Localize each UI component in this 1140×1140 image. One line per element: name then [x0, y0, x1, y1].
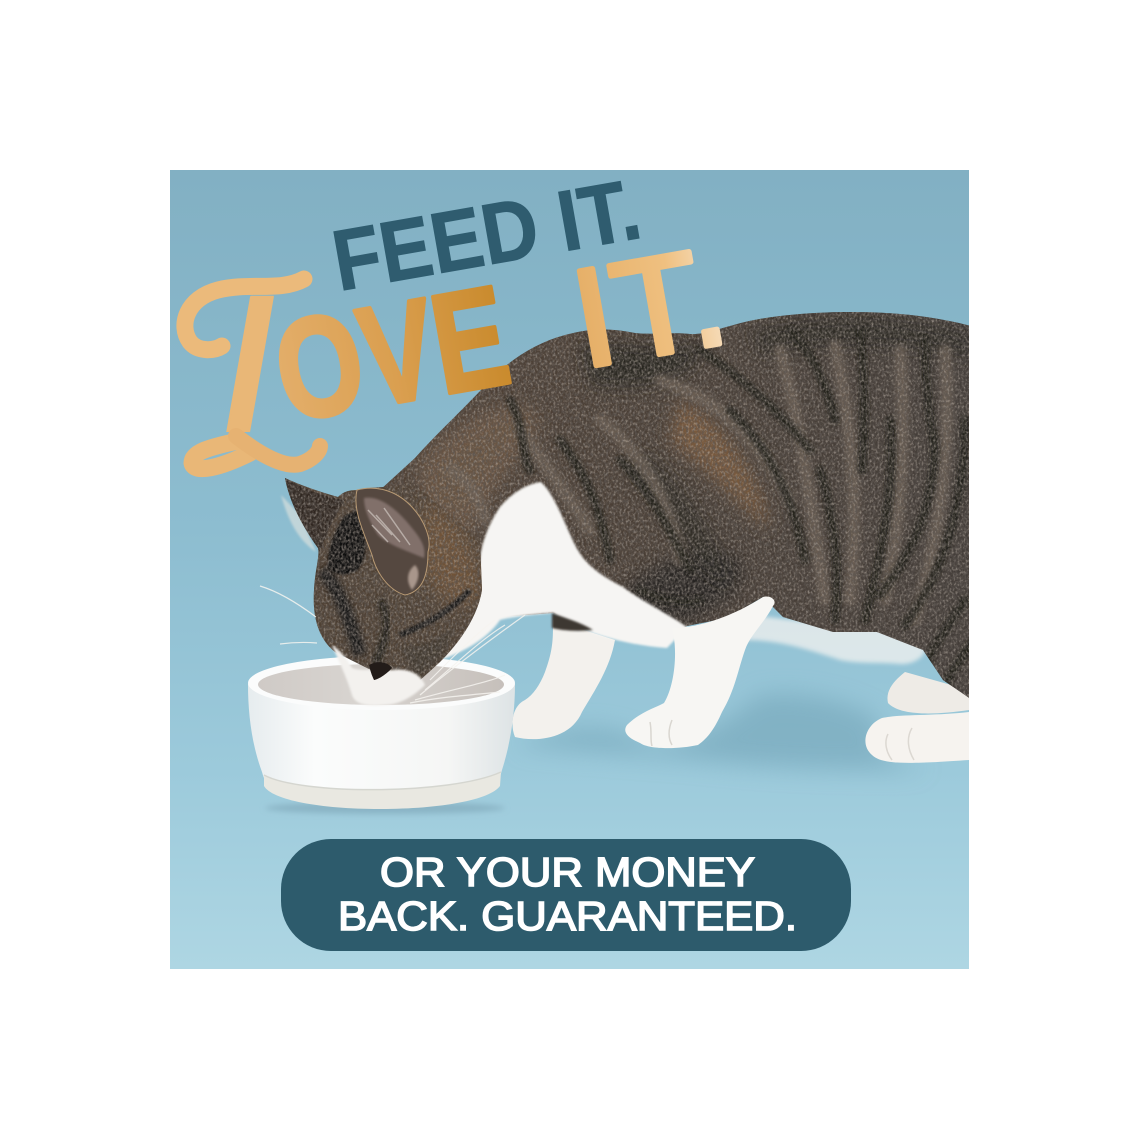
- guarantee text: OR YOUR MONEY: [380, 849, 755, 895]
- guarantee pill: [281, 839, 851, 951]
- love capital L: L: [195, 248, 371, 505]
- hind paw toes: [886, 728, 914, 760]
- cat nose: [369, 662, 392, 680]
- front paw toes: [650, 720, 672, 746]
- cat muzzle: [332, 645, 425, 706]
- cat hind paw: [865, 712, 969, 763]
- headline: love it: [176, 249, 722, 478]
- cat dark belly patch: [552, 613, 593, 631]
- floor shadow: [265, 694, 930, 814]
- cat whiskers: [260, 586, 525, 703]
- cat body: [380, 312, 975, 702]
- panel: photo background: [170, 161, 975, 969]
- love capital L: [176, 270, 328, 478]
- ear fur streaks: [368, 508, 410, 545]
- right ear: [356, 488, 429, 595]
- far hind paw: [887, 672, 969, 713]
- cat white chest: [440, 482, 687, 660]
- love letters: OVE: [264, 256, 520, 453]
- it letters: IT.: [561, 217, 738, 398]
- cat belly fluff: [745, 615, 925, 664]
- far front leg: [512, 620, 615, 739]
- cat: [260, 310, 975, 763]
- cat fur markings: [380, 310, 975, 705]
- guarantee text: [340, 856, 794, 932]
- cat front leg: [625, 597, 775, 748]
- guarantee text: BACK. GUARANTEED.: [338, 893, 797, 939]
- infographic ad: cat eating from bowl: [170, 170, 969, 969]
- headline: feed it: FEED IT.: [326, 161, 648, 310]
- left ear fringe: [281, 495, 316, 552]
- bowl: [248, 656, 515, 809]
- cat head: [280, 475, 490, 706]
